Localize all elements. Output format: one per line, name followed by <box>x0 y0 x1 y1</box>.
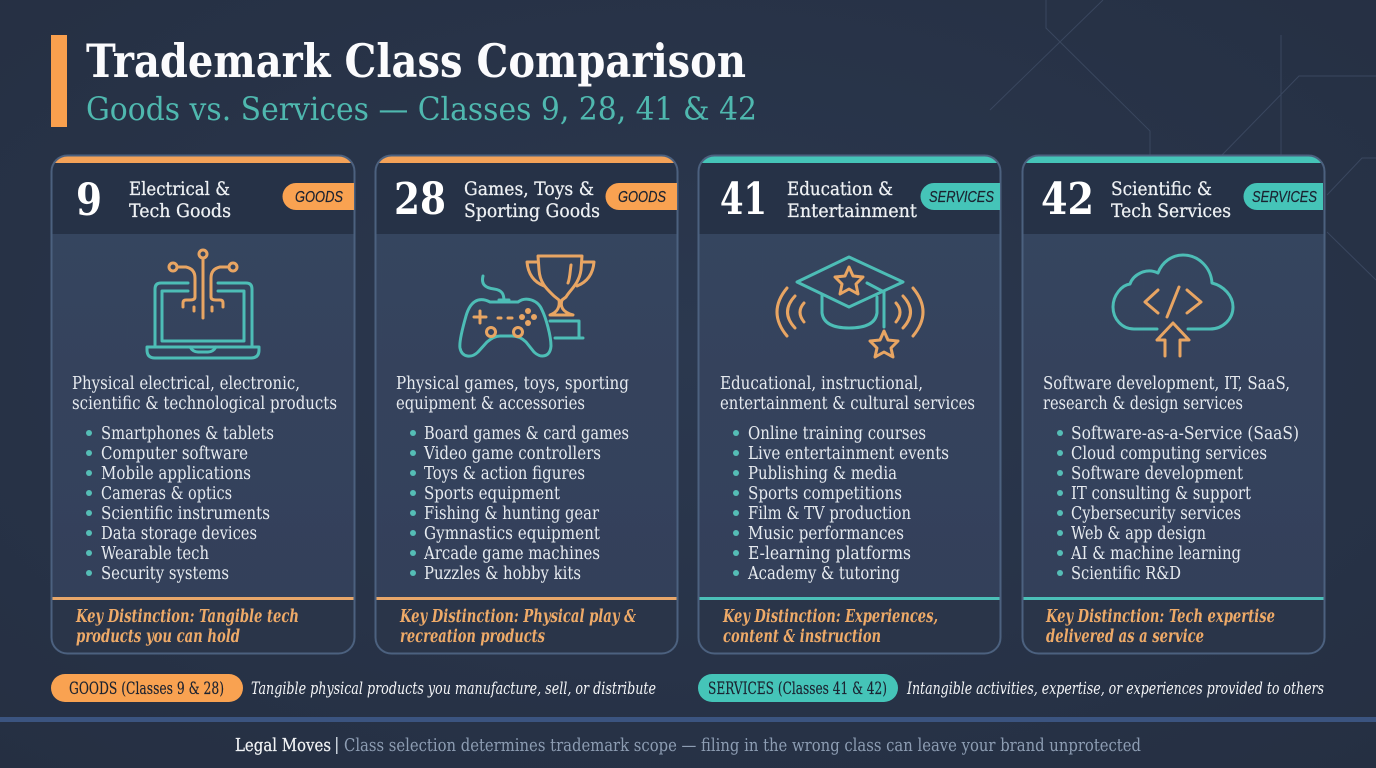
class number: 41 <box>720 174 767 225</box>
key distinction: Key Distinction: Experiences, <box>722 607 938 627</box>
list of examples: Live entertainment events <box>748 444 949 464</box>
list of examples <box>1057 424 1299 584</box>
class number: 9 <box>76 175 102 226</box>
subtitle: Goods vs. Services — Classes 9, 28, 41 & 42 <box>86 90 757 128</box>
description: Physical electrical, electronic, <box>72 374 300 394</box>
description <box>72 374 337 414</box>
goods pill: GOODS (Classes 9 & 28) <box>69 679 224 698</box>
key distinction: Key Distinction: Physical play & <box>399 607 636 627</box>
key distinction <box>399 607 636 647</box>
class heading: Entertainment <box>787 200 917 222</box>
footer: Class selection determines trademark scope — filing in the wrong class can leave your brand unprotected <box>344 735 1141 756</box>
title: Trademark Class Comparison <box>86 34 746 88</box>
description: equipment & accessories <box>396 394 585 414</box>
list of examples <box>733 424 949 584</box>
description: research & design services <box>1043 394 1243 414</box>
goods definition: Tangible physical products you manufacture, sell, or distribute <box>251 679 656 698</box>
panel: class 9 <box>51 155 355 654</box>
class heading <box>129 178 231 222</box>
key distinction: delivered as a service <box>1046 627 1204 647</box>
badge: goods: GOODS <box>618 189 666 206</box>
list of examples: Toys & action figures <box>424 464 585 484</box>
class heading: Education & <box>787 178 893 200</box>
list of examples: Mobile applications <box>101 464 251 484</box>
list of examples: Cybersecurity services <box>1071 504 1241 524</box>
icon: cloud with code <box>1113 255 1233 356</box>
key distinction <box>1045 607 1275 647</box>
list of examples: IT consulting & support <box>1071 484 1251 504</box>
list of examples: Smartphones & tablets <box>101 424 274 444</box>
list of examples: Puzzles & hobby kits <box>424 564 581 584</box>
legend: goods <box>51 674 656 702</box>
description: Software development, IT, SaaS, <box>1043 374 1290 394</box>
panel: class 41 <box>698 155 1001 654</box>
list of examples: Scientific instruments <box>101 504 270 524</box>
list of examples: Arcade game machines <box>423 544 600 564</box>
class heading: Tech Services <box>1111 200 1231 222</box>
badge: goods <box>282 183 354 210</box>
icon: laptop with circuit <box>147 250 259 358</box>
list of examples: Film & TV production <box>748 504 911 524</box>
list of examples: Web & app design <box>1071 524 1206 544</box>
list of examples: Cameras & optics <box>101 484 232 504</box>
list of examples: Video game controllers <box>423 444 601 464</box>
key distinction: Key Distinction: Tangible tech <box>75 607 299 627</box>
class heading: Scientific & <box>1111 178 1212 200</box>
description: scientific & technological products <box>72 394 337 414</box>
list of examples: AI & machine learning <box>1070 544 1241 564</box>
list of examples: Software-as-a-Service (SaaS) <box>1071 424 1299 444</box>
services pill <box>698 674 898 702</box>
list of examples: Sports equipment <box>424 484 560 504</box>
description <box>720 374 975 414</box>
panel: class 28 <box>375 155 678 654</box>
description: entertainment & cultural services <box>720 394 975 414</box>
class heading: Games, Toys & <box>464 178 594 200</box>
list of examples: Sports competitions <box>748 484 902 504</box>
list of examples: Data storage devices <box>101 524 257 544</box>
list of examples: Computer software <box>101 444 248 464</box>
description <box>396 374 629 414</box>
list of examples: Fishing & hunting gear <box>424 504 600 524</box>
badge: services: SERVICES <box>929 189 994 206</box>
accent bar <box>51 35 67 127</box>
icon: graduation cap <box>777 257 923 357</box>
list of examples: Academy & tutoring <box>747 564 900 584</box>
class heading: Electrical & <box>129 178 230 200</box>
description: Physical games, toys, sporting <box>396 374 629 394</box>
key distinction <box>75 607 299 647</box>
services pill: SERVICES (Classes 41 & 42) <box>708 679 887 698</box>
list of examples: Security systems <box>101 564 229 584</box>
list of examples: Publishing & media <box>748 464 897 484</box>
description <box>1043 374 1290 414</box>
class heading <box>1111 178 1231 222</box>
list of examples <box>86 424 274 584</box>
list of examples: Cloud computing services <box>1071 444 1267 464</box>
list of examples: Board games & card games <box>424 424 629 444</box>
goods pill <box>51 674 243 702</box>
footer: Legal Moves <box>235 735 331 756</box>
badge: services: SERVICES <box>1252 189 1317 206</box>
icon: game controller and trophy <box>460 256 594 356</box>
panel: class 42 <box>1022 155 1325 654</box>
key distinction: products you can hold <box>76 627 240 647</box>
legend: services <box>698 674 1324 702</box>
list of examples: Software development <box>1071 464 1243 484</box>
list of examples: Wearable tech <box>101 544 209 564</box>
class heading: Sporting Goods <box>464 200 600 222</box>
list of examples <box>410 424 629 584</box>
key distinction: content & instruction <box>723 627 881 647</box>
badge: goods <box>606 183 677 210</box>
class number: 42 <box>1041 174 1094 225</box>
class heading <box>464 178 600 222</box>
list of examples: Online training courses <box>748 424 926 444</box>
key distinction: Key Distinction: Tech expertise <box>1045 607 1275 627</box>
description: Educational, instructional, <box>720 374 923 394</box>
class heading: Tech Goods <box>129 200 231 222</box>
list of examples: Gymnastics equipment <box>424 524 600 544</box>
class heading <box>787 178 917 222</box>
list of examples: Scientific R&D <box>1071 564 1181 584</box>
badge: services <box>1244 183 1323 210</box>
badge: goods: GOODS <box>295 189 343 206</box>
title block <box>51 34 757 128</box>
list of examples: E-learning platforms <box>748 544 911 564</box>
key distinction <box>722 607 938 647</box>
key distinction: recreation products <box>400 627 545 647</box>
list of examples: Music performances <box>748 524 904 544</box>
class number: 28 <box>394 174 446 225</box>
badge: services <box>921 183 1000 210</box>
